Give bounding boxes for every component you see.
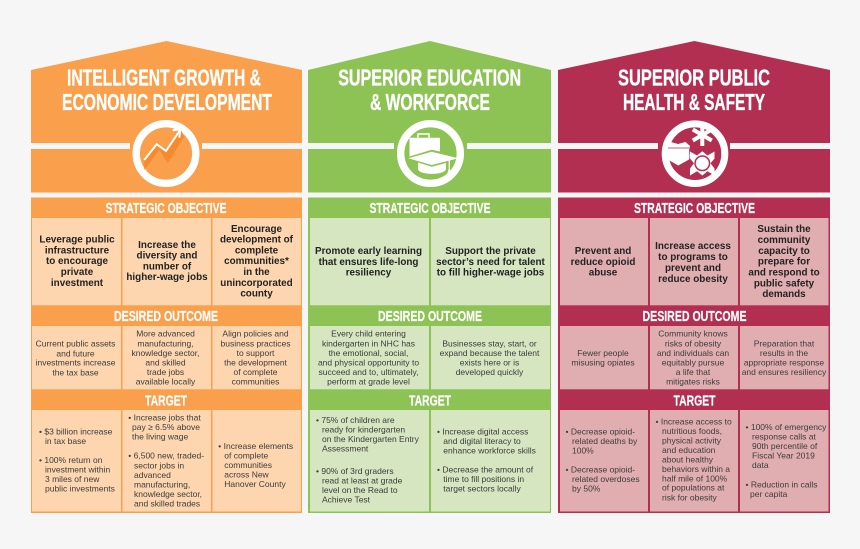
targets text — [39, 412, 293, 509]
strategic objectives text: reduce opioid — [571, 257, 635, 268]
targets text: 3 miles of new — [45, 474, 100, 484]
targets text: level on the Read to — [322, 485, 398, 495]
desired outcomes text: Preparation that — [754, 338, 815, 348]
strategic objectives text: county — [240, 288, 273, 300]
desired outcomes text: the development — [224, 357, 288, 367]
targets text: advanced — [134, 470, 171, 480]
desired outcomes text: Every child entering — [331, 329, 406, 339]
targets text — [566, 417, 827, 502]
targets text — [316, 415, 536, 504]
targets text: half mile of 100% — [662, 473, 728, 483]
panel: superior public health and safety — [558, 41, 830, 513]
desired outcomes text: Businesses stay, start, or — [442, 338, 537, 348]
targets text: time to fill positions in — [443, 474, 524, 484]
strategic objectives text: Promote early learning — [315, 246, 422, 257]
desired outcomes text: equitably pursue — [662, 357, 724, 367]
targets text: manufacturing, — [134, 479, 190, 489]
desired outcomes text: Align policies and — [222, 329, 289, 339]
strategic objectives text: Increase access — [655, 241, 731, 252]
panel: superior education and workforce — [308, 41, 551, 513]
strategic objectives text: Encourage — [231, 224, 283, 235]
icon: police, medical and fire symbols — [658, 124, 730, 184]
targets text: the living wage — [132, 432, 189, 442]
house header: green — [308, 41, 551, 192]
targets text: • Decrease the amount of — [437, 464, 534, 474]
targets text: related overdoses — [572, 474, 640, 484]
desired outcomes text: trade jobs — [147, 367, 184, 377]
desired outcomes text: Fewer people — [577, 348, 629, 358]
strategic objectives text: demands — [762, 289, 806, 300]
icon: rising arrow — [130, 124, 202, 183]
desired outcomes text: communities — [232, 376, 279, 386]
targets text: communities — [224, 460, 272, 470]
desired outcomes text: to support — [237, 348, 275, 358]
targets text: • 90% of 3rd graders — [316, 466, 394, 476]
heading: superior education — [338, 65, 521, 115]
desired outcomes text: appropriate response — [744, 357, 824, 367]
targets text: 90th percentile of — [752, 441, 818, 451]
targets text: in tax base — [45, 436, 86, 446]
desired outcomes text: and skilled — [145, 357, 186, 367]
strategic objectives text: number of — [143, 262, 192, 272]
targets text: read at least at grade — [322, 475, 403, 485]
strategic objectives text: development of — [220, 234, 294, 246]
heading: superior education: SUPERIOR EDUCATION — [338, 65, 521, 91]
targets text: • Increase elements — [218, 441, 293, 451]
strategic objectives text: in the — [243, 267, 270, 278]
heading: superior public: HEALTH & SAFETY — [623, 89, 765, 115]
targets text: across New — [224, 469, 270, 479]
section heading: strategic objective: STRATEGIC OBJECTIVE — [634, 200, 755, 217]
desired outcomes text: exists here or is — [460, 357, 519, 367]
targets text: and digital literacy to — [443, 436, 521, 446]
targets text: and skilled trades — [134, 499, 200, 509]
strategic objectives text: reduce obesity — [658, 274, 728, 285]
targets text: per capita — [750, 489, 788, 499]
targets text: of complete — [224, 450, 269, 460]
targets text: investment within — [45, 464, 110, 474]
house header: orange — [31, 41, 302, 192]
desired outcomes text — [36, 329, 290, 386]
strategic objectives text: to programs to — [658, 252, 728, 263]
strategic objectives text: diversity and — [137, 250, 197, 262]
targets text: by 50% — [572, 484, 601, 494]
targets text: response calls at — [752, 432, 816, 442]
strategic objectives text: public safety — [754, 278, 815, 290]
section heading: desired outcome: DESIRED OUTCOME — [114, 308, 218, 325]
targets text: enhance workforce skills — [443, 446, 536, 456]
desired outcomes text: business practices — [221, 338, 290, 348]
desired outcomes text: Community knows — [658, 329, 728, 339]
targets text: • Decrease opioid- — [566, 464, 635, 474]
strategic objectives text: Prevent and — [575, 246, 631, 257]
desired outcomes text: and ensures resiliency — [742, 367, 827, 377]
section: red table — [558, 198, 830, 513]
targets text: ready for kindergarten — [322, 425, 405, 435]
targets text: Assessment — [322, 444, 369, 454]
targets text: • 100% return on — [39, 455, 103, 465]
targets text: data — [752, 460, 769, 470]
strategic objectives text: Leverage public — [39, 234, 115, 246]
desired outcomes text: and future — [56, 348, 95, 358]
targets text: sector jobs in — [134, 460, 184, 470]
targets text: related deaths by — [572, 436, 638, 446]
section: orange table — [31, 198, 302, 513]
strategic objectives text: infrastructure — [45, 246, 110, 256]
desired outcomes text: developed quickly — [456, 367, 524, 377]
section heading: desired outcome: DESIRED OUTCOME — [378, 308, 482, 325]
targets text: • Increase jobs that — [128, 412, 201, 422]
strategic objectives text: prepare for — [758, 256, 810, 268]
targets text: • Increase access to — [656, 417, 732, 427]
targets text: 100% — [572, 445, 594, 455]
strategic objectives text: Increase the — [138, 240, 196, 251]
targets text: Fiscal Year 2019 — [752, 450, 815, 460]
desired outcomes text: investments increase — [36, 358, 116, 368]
targets text: Hanover County — [224, 479, 286, 489]
desired outcomes text: and physical opportunity to — [318, 357, 419, 367]
desired outcomes text: manufacturing, — [137, 338, 194, 348]
targets text: on the Kindergarten Entry — [322, 434, 420, 444]
desired outcomes text: mitigates risks — [666, 376, 720, 386]
section heading: target: TARGET — [674, 392, 716, 410]
desired outcomes text: and individuals can — [657, 348, 729, 358]
targets text: • Increase digital access — [437, 427, 528, 437]
desired outcomes text — [318, 329, 540, 386]
strategic objectives text: to fill higher-wage jobs — [437, 268, 545, 278]
desired outcomes text: expand because the talent — [440, 348, 540, 358]
strategic objectives text: capacity to — [758, 246, 810, 257]
targets text: public investments — [45, 484, 115, 494]
strategic objectives text: Support the private — [445, 246, 536, 257]
desired outcomes text — [571, 329, 827, 386]
heading: superior education: & WORKFORCE — [370, 89, 490, 115]
heading: intelligent growth: INTELLIGENT GROWTH & — [67, 65, 261, 91]
strategic objectives text: abuse — [589, 268, 618, 278]
targets text: physical activity — [662, 436, 722, 446]
strategic objectives text: communities* — [224, 256, 289, 267]
desired outcomes text: the emotional, social, — [329, 348, 408, 358]
strategic objectives text: sector’s need for talent — [436, 257, 546, 268]
targets text: Achieve Test — [322, 494, 371, 504]
strategic objectives text: investment — [51, 278, 104, 289]
section heading: strategic objective: STRATEGIC OBJECTIVE — [106, 200, 226, 217]
house header: red — [558, 41, 830, 192]
strategic objectives text: community — [758, 235, 811, 246]
desired outcomes text: knowledge sector, — [131, 348, 200, 358]
targets text: pay ≥ 6.5% above — [132, 422, 200, 432]
heading: intelligent growth: ECONOMIC DEVELOPMENT — [62, 89, 272, 115]
heading: superior public: SUPERIOR PUBLIC — [618, 65, 770, 91]
desired outcomes text: perform at grade level — [327, 376, 410, 386]
desired outcomes text: a life that — [676, 367, 711, 377]
strategic objectives text: that ensures life-long — [319, 257, 418, 268]
section heading: target: TARGET — [145, 392, 187, 410]
desired outcomes text: risks of obesity — [665, 338, 722, 348]
targets text: of populations at — [662, 483, 725, 493]
strategic objectives text: prevent and — [665, 263, 721, 274]
panel: intelligent growth and economic development — [31, 41, 302, 513]
strategic objectives text: higher-wage jobs — [126, 272, 208, 283]
desired outcomes text: kindergarten in NHC has — [322, 338, 415, 348]
desired outcomes text: succeed and to, ultimately, — [318, 367, 419, 377]
desired outcomes text: the tax base — [52, 367, 99, 377]
targets text: knowledge sector, — [134, 489, 202, 499]
section heading: desired outcome: DESIRED OUTCOME — [642, 308, 746, 325]
targets text: target sectors locally — [443, 484, 522, 494]
targets text: • $3 billion increase — [39, 426, 113, 436]
desired outcomes text: misusing opiates — [571, 358, 635, 368]
section heading: strategic objective: STRATEGIC OBJECTIVE — [370, 200, 490, 217]
targets text: • 6,500 new, traded- — [128, 451, 204, 461]
strategic objectives text: resiliency — [346, 268, 392, 278]
targets text: risk for obesity — [662, 492, 718, 502]
heading: superior public — [618, 65, 770, 115]
strategic objectives text: unincorporated — [220, 278, 293, 289]
section: green table — [308, 198, 551, 513]
targets text: • Reduction in calls — [746, 479, 817, 489]
targets text: • 75% of children are — [316, 415, 395, 425]
heading: intelligent growth — [62, 65, 272, 115]
strategic objectives text — [39, 224, 294, 300]
section heading: target: TARGET — [409, 392, 451, 410]
strategic objectives text: and respond to — [748, 268, 820, 278]
strategic objectives text — [571, 224, 820, 300]
strategic objectives text: complete — [235, 246, 279, 256]
strategic objectives text — [315, 246, 546, 278]
desired outcomes text: results in the — [760, 348, 808, 358]
targets text: about healthy — [662, 454, 714, 464]
strategic objectives text: to encourage — [46, 256, 109, 267]
desired outcomes text: available locally — [136, 376, 196, 386]
targets text: nutritious foods, — [662, 426, 722, 436]
targets text: • 100% of emergency — [746, 422, 827, 432]
desired outcomes text: of complete — [234, 367, 278, 377]
strategic objectives text: private — [61, 267, 94, 278]
desired outcomes text: Current public assets — [36, 339, 115, 349]
targets text: • Decrease opioid- — [566, 426, 635, 436]
desired outcomes text: More advanced — [136, 329, 195, 339]
icon: briefcase and graduation cap — [394, 124, 467, 183]
targets text: and education — [662, 445, 716, 455]
targets text: behaviors within a — [662, 464, 730, 474]
strategic objectives text: Sustain the — [757, 224, 811, 235]
